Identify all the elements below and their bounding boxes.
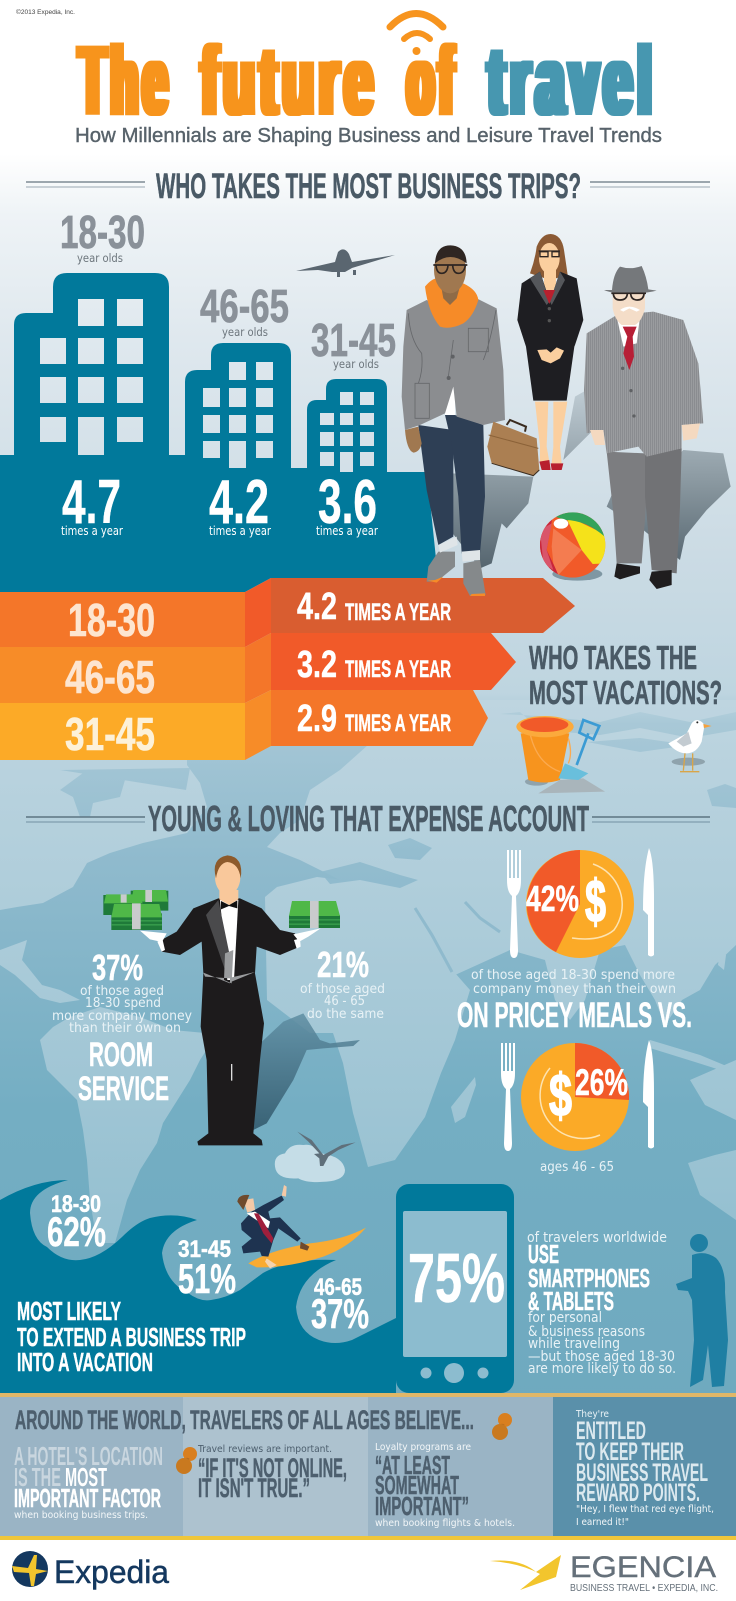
stat: 21%: 46 - 65 — [324, 994, 365, 1009]
logo: Egencia: EGENCIA — [570, 1551, 716, 1584]
band 31-45: 31-45 — [65, 708, 155, 760]
icon: wifi signal — [390, 14, 443, 55]
panel: loyalty programs: when booking flights & hotels. — [375, 1518, 515, 1529]
text: smartphones and tablets: USE — [528, 1239, 559, 1269]
map shadows behind people — [450, 390, 731, 568]
briefcase — [487, 420, 539, 476]
chart: business trips city skyline — [0, 206, 438, 592]
title: of — [407, 26, 458, 135]
panel: reward points: I earned it!" — [576, 1517, 629, 1528]
icon: pin top — [492, 1413, 512, 1440]
logo: Expedia — [12, 1551, 169, 1590]
arrow 3.2 times a year: TIMES A YEAR — [345, 656, 451, 683]
yellow strip — [0, 1536, 736, 1540]
waiter shadow — [253, 1013, 360, 1130]
arrow 4.2 times a year — [271, 578, 575, 633]
caption: pricey meals: company money than their own — [473, 982, 676, 997]
stat: room service 37%: than their own on — [69, 1021, 181, 1036]
logo: Egencia: BUSINESS TRAVEL • EXPEDIA, INC. — [570, 1583, 718, 1594]
label 51% — [178, 1236, 236, 1302]
text: smartphones and tablets: for personal — [528, 1310, 602, 1326]
icon: phone with 75%: 75% — [408, 1239, 505, 1317]
beach ball — [540, 512, 607, 581]
arrow 3.2 times a year: 3.2 — [297, 644, 337, 686]
panel: loyalty programs: IMPORTANT” — [375, 1491, 469, 1521]
label 37% — [311, 1274, 369, 1337]
gold strip — [0, 1393, 736, 1397]
buildings and base — [0, 273, 438, 592]
age label 18-30: 18-30 — [60, 206, 145, 258]
panel: loyalty programs — [368, 1397, 553, 1536]
band 31-45 — [0, 690, 271, 760]
stat: 21% — [300, 944, 385, 1022]
waiter with money stacks — [103, 855, 360, 1145]
wave caption: TO EXTEND A BUSINESS TRIP — [17, 1322, 246, 1352]
panel: travel reviews: IT ISN'T TRUE.” — [198, 1473, 310, 1503]
age label 31-45 — [311, 314, 396, 371]
value 4.2: times a year — [209, 524, 271, 538]
woman in black suit — [517, 234, 583, 470]
arrow 2.9 times a year: 2.9 — [297, 698, 337, 740]
wave caption: MOST LIKELY — [17, 1296, 121, 1326]
panel: hotel location: IMPORTANT FACTOR — [14, 1483, 161, 1513]
stat: room service 37%: more company money — [52, 1009, 192, 1024]
stat: room service 37%: SERVICE — [78, 1070, 169, 1108]
surfer — [237, 1185, 366, 1268]
value 4.7 — [61, 468, 123, 538]
caption: ages 46-65: ages 46 - 65 — [540, 1160, 614, 1175]
icon: phone with 75% — [396, 1184, 514, 1393]
chart: pie plate 26%: 26% — [575, 1062, 628, 1103]
label 51%: 31-45 — [178, 1236, 231, 1263]
icon: seagull — [668, 720, 712, 772]
stat: room service 37% — [52, 947, 192, 1108]
travelers illustration — [402, 234, 731, 596]
age label 46-65 — [200, 280, 289, 339]
title: future — [201, 26, 378, 135]
label 62%: 18-30 — [51, 1191, 101, 1218]
age label 31-45: 31-45 — [311, 314, 396, 366]
label 37%: 46-65 — [314, 1274, 362, 1301]
label 62% — [47, 1191, 106, 1255]
text: smartphones and tablets — [527, 1230, 676, 1377]
stat: room service 37%: of those aged — [80, 984, 164, 999]
arrow 2.9 times a year: TIMES A YEAR — [345, 710, 451, 737]
arrow 2.9 times a year — [271, 690, 488, 746]
chart: pie plate 26% — [501, 1040, 654, 1151]
logo: Egencia — [490, 1551, 718, 1594]
band 18-30: 18-30 — [68, 594, 155, 646]
panel: hotel location — [0, 1397, 183, 1536]
value 4.7: times a year — [61, 524, 123, 538]
text: smartphones and tablets: & TABLETS — [528, 1286, 614, 1316]
logo: Expedia: Expedia — [54, 1554, 169, 1590]
money stack left — [103, 890, 168, 930]
man with scarf — [402, 245, 505, 596]
heading: most vacations — [529, 639, 722, 711]
chart: vacations ribbon — [0, 578, 575, 760]
chart: wave extend trip — [0, 1180, 396, 1393]
value 4.7: 4.7 — [62, 468, 121, 537]
value 3.6: 3.6 — [318, 468, 377, 537]
age label 46-65: 46-65 — [200, 280, 289, 332]
panel: reward points: They're — [575, 1409, 609, 1420]
label 37%: 37% — [311, 1290, 369, 1337]
icon: fork — [507, 850, 521, 958]
icon: bucket and shovel — [516, 716, 605, 793]
stat: 21%: 21% — [317, 944, 369, 985]
caption: pricey meals: of those aged 18-30 spend more — [471, 968, 675, 983]
age label 18-30 — [60, 206, 145, 265]
icon: fork — [501, 1043, 515, 1151]
text: smartphones and tablets: —but those aged 18-30 — [528, 1349, 675, 1365]
age label 31-45: year olds — [333, 357, 379, 371]
value 3.6 — [316, 468, 378, 538]
panel: loyalty programs: Loyalty programs are — [375, 1442, 471, 1453]
wave caption: INTO A VACATION — [17, 1347, 153, 1377]
world map background — [0, 700, 736, 1243]
chart: pie plate 42% — [507, 848, 654, 958]
panel: reward points: ENTITLED — [576, 1417, 646, 1445]
panel: reward points: "Hey, I flew that red eye flight, — [576, 1504, 714, 1515]
older man with hat — [584, 266, 703, 589]
subtitle: How Millennials are Shaping Business and Leisure Travel Trends — [75, 125, 662, 147]
arrow 4.2 times a year: 4.2 — [297, 586, 337, 628]
age label 18-30: year olds — [77, 251, 123, 265]
value 3.6: times a year — [316, 524, 378, 538]
panel: loyalty programs: “AT LEAST — [375, 1450, 450, 1480]
icon: person using phone silhouette — [676, 1234, 728, 1387]
copyright: ©2013 Expedia, Inc. — [16, 8, 75, 16]
text: smartphones and tablets: are more likely to do so. — [528, 1361, 676, 1377]
panel: travel reviews: “IF IT'S NOT ONLINE, — [198, 1453, 347, 1483]
icon: pin left — [176, 1447, 197, 1474]
stat: 21%: of those aged — [300, 982, 385, 997]
arrow 3.2 times a year — [271, 633, 516, 690]
text: smartphones and tablets: while traveling — [528, 1336, 620, 1352]
text: smartphones and tablets: of travelers worldwide — [527, 1230, 667, 1246]
panel: hotel location: IS THE MOST — [14, 1462, 107, 1492]
money stack right — [289, 901, 340, 928]
icon: knife — [643, 1040, 654, 1148]
panel: hotel location: A HOTEL'S LOCATION — [14, 1441, 163, 1471]
value 4.2: 4.2 — [209, 468, 269, 537]
panel: travel reviews: Travel reviews are important. — [197, 1444, 332, 1455]
stat: room service 37%: 18-30 spend — [85, 996, 161, 1011]
waiter figure — [140, 855, 321, 1145]
icon: knife — [643, 848, 654, 956]
band 46-65 — [0, 633, 271, 703]
panel: loyalty programs: SOMEWHAT — [375, 1470, 459, 1500]
panel: reward points — [553, 1397, 736, 1536]
chart: pie plate 26%: $ — [549, 1062, 572, 1129]
stat: room service 37%: ROOM — [89, 1036, 153, 1074]
chart: pie plate 42%: $ — [585, 868, 606, 935]
label 51%: 51% — [178, 1255, 236, 1302]
caption: pricey meals — [457, 968, 692, 1035]
stat: room service 37%: 37% — [92, 947, 143, 988]
band 18-30 — [0, 578, 271, 647]
label 62%: 62% — [47, 1208, 106, 1255]
chart: pie plate 42%: 42% — [526, 878, 579, 919]
title — [79, 26, 657, 135]
panel: hotel location: when booking business trips. — [14, 1510, 148, 1521]
wave caption — [17, 1296, 246, 1377]
text: smartphones and tablets: & business reasons — [528, 1324, 645, 1340]
arrow 4.2 times a year: TIMES A YEAR — [345, 599, 451, 626]
text: smartphones and tablets: SMARTPHONES — [528, 1263, 650, 1293]
icon: cloud and bird — [275, 1132, 356, 1182]
icon: airplane — [296, 249, 395, 277]
panel: travel reviews — [183, 1397, 368, 1536]
band 46-65: 46-65 — [65, 651, 155, 703]
age label 46-65: year olds — [222, 325, 268, 339]
stat: 21%: do the same — [307, 1007, 384, 1022]
title: The — [79, 26, 172, 135]
